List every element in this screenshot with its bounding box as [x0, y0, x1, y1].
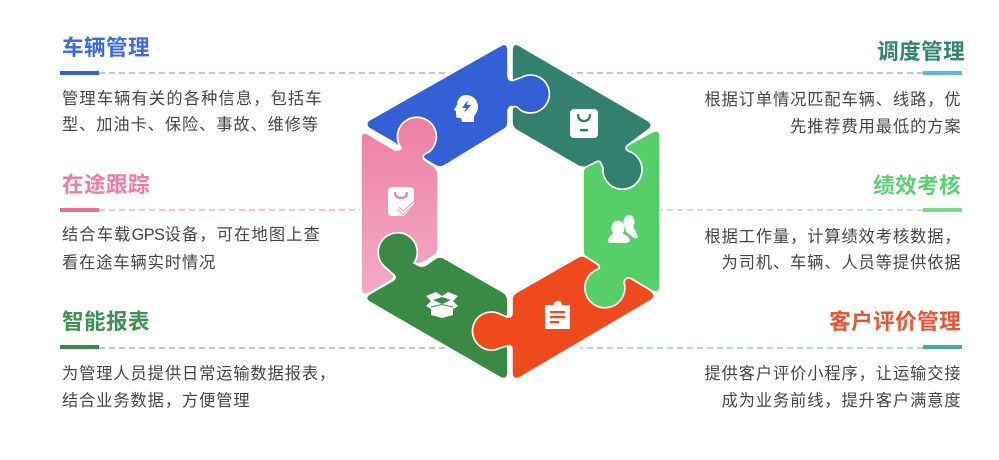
- text: 调度管理 line 1: 根据订单情况匹配车辆、线路，优: [704, 91, 962, 109]
- panel: 智能报表: [60, 309, 336, 410]
- puzzle piece: pink: [361, 117, 438, 294]
- text: 在途跟踪 line 1: 结合车载GPS设备，可在地图上查: [62, 226, 321, 244]
- accent bar: 客户评价管理: [923, 345, 962, 349]
- accent bar: 智能报表: [60, 345, 99, 349]
- icon: open box: [426, 292, 458, 318]
- text: 智能报表 line 1: 为管理人员提供日常运输数据报表，: [62, 365, 336, 383]
- text: 车辆管理 line 1: 管理车辆有关的各种信息，包括车: [62, 90, 323, 108]
- icon: head with lightning bolt: [454, 95, 478, 122]
- heading: 客户评价管理: 客户评价管理: [829, 309, 961, 334]
- puzzle piece: lime green: [583, 131, 660, 308]
- accent bar: 调度管理: [923, 71, 962, 75]
- text: 智能报表 line 2: 结合业务数据，方便管理: [62, 392, 251, 410]
- icon: two people: [608, 215, 638, 243]
- text: 客户评价管理 line 2: 成为业务前线，提升客户满意度: [722, 392, 962, 410]
- puzzle piece: blue: [367, 44, 549, 167]
- heading: 车辆管理: 车辆管理: [62, 35, 150, 60]
- icon: clipboard: [545, 301, 570, 329]
- accent bar: 绩效考核: [923, 208, 962, 212]
- accent bar: 在途跟踪: [60, 208, 99, 212]
- accent bar: 车辆管理: [60, 71, 99, 75]
- panel: 客户评价管理: [704, 309, 962, 410]
- puzzle piece: orange: [473, 256, 654, 379]
- text: 在途跟踪 line 2: 看在途车辆实时情况: [62, 254, 216, 272]
- text: 客户评价管理 line 1: 提供客户评价小程序，让运输交接: [704, 365, 962, 383]
- text: 绩效考核 line 1: 根据工作量，计算绩效考核数据，: [704, 228, 962, 246]
- text: 调度管理 line 2: 先推荐费用最低的方案: [790, 118, 962, 136]
- panel: 车辆管理: [60, 35, 323, 134]
- panel: 在途跟踪: [60, 172, 321, 272]
- puzzle piece: teal: [512, 44, 651, 189]
- text: 车辆管理 line 2: 型、加油卡、保险、事故、维修等: [62, 116, 319, 134]
- heading: 智能报表: 智能报表: [62, 309, 150, 334]
- panel: 绩效考核: [704, 173, 962, 272]
- heading: 调度管理: 调度管理: [877, 39, 965, 64]
- heading: 绩效考核: 绩效考核: [873, 173, 961, 198]
- panel: 调度管理: [704, 39, 965, 136]
- text: 绩效考核 line 2: 为司机、车辆、人员等提供依据: [722, 254, 962, 272]
- icon: teal card with smile: [570, 109, 598, 138]
- puzzle piece: dark green: [366, 233, 508, 379]
- heading: 在途跟踪: 在途跟踪: [62, 172, 150, 197]
- icon: pink card with check: [388, 187, 414, 216]
